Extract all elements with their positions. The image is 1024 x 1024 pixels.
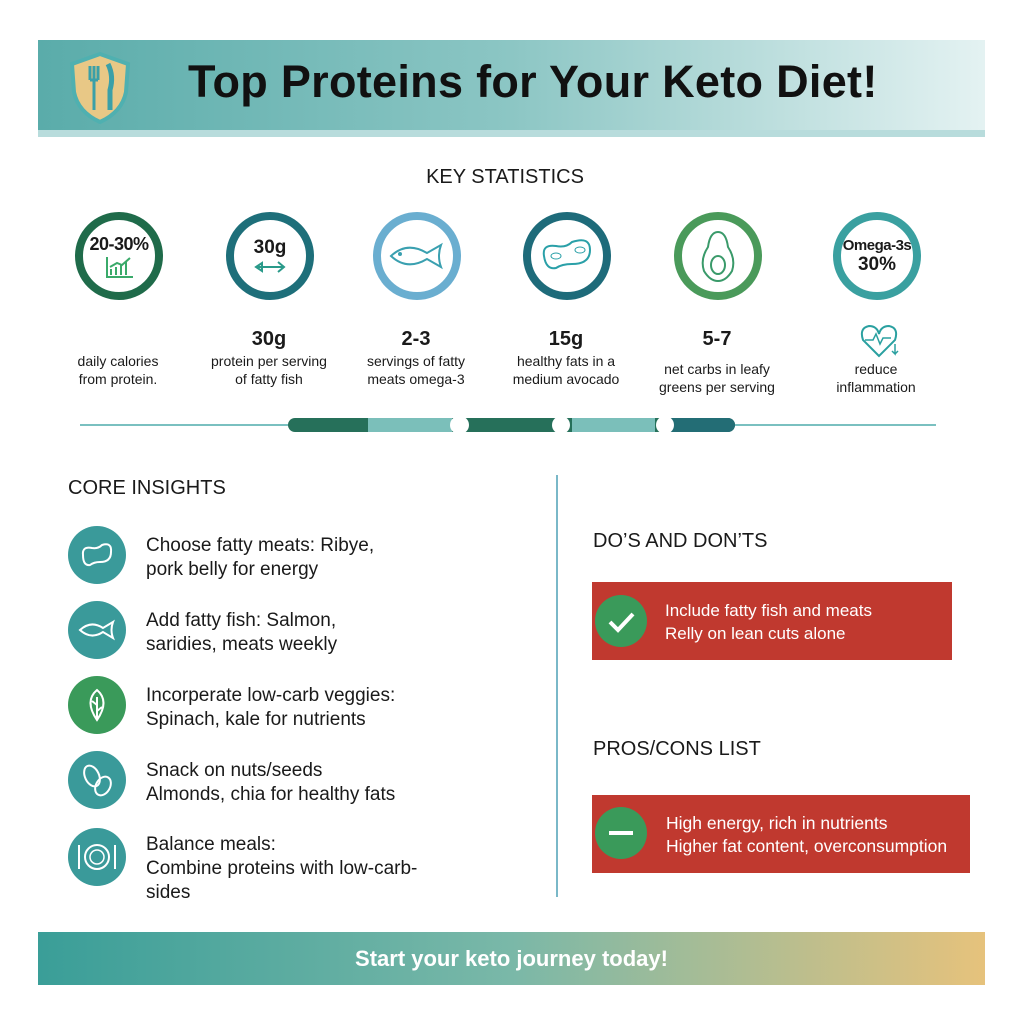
- footer banner: Start your keto journey today!: [355, 946, 668, 971]
- pros/cons box: Higher fat content, overconsumption: [666, 836, 947, 856]
- stat 4: medium avocado: [513, 371, 619, 387]
- insight 5: sides: [146, 882, 190, 903]
- stat 3: meats omega-3: [367, 371, 465, 387]
- do's box: Include fatty fish and meats: [665, 601, 872, 620]
- insight 2: [68, 601, 337, 659]
- stat 2: [211, 212, 327, 387]
- insight 4: Snack on nuts/seeds: [146, 760, 322, 781]
- stat 1: from protein.: [79, 371, 157, 387]
- insight 1: pork belly for energy: [146, 559, 318, 580]
- stat 5: 5-7: [703, 328, 731, 350]
- stat 6: [833, 212, 921, 395]
- stat 4: [513, 212, 619, 387]
- insight 5: [68, 828, 417, 903]
- stat 6: 30%: [858, 254, 896, 274]
- heading: pros/cons: PROS/CONS LIST: [593, 738, 761, 760]
- insight 2: saridies, meats weekly: [146, 634, 337, 655]
- pros/cons box: High energy, rich in nutrients: [666, 813, 887, 833]
- footer banner: [38, 932, 985, 985]
- icon: shield with fork and knife: [70, 52, 130, 124]
- insight 1: [68, 526, 374, 584]
- stat 6: Omega-3s: [843, 236, 911, 254]
- insight 5: Combine proteins with low-carb-: [146, 858, 417, 879]
- insight 4: Almonds, chia for healthy fats: [146, 784, 395, 805]
- stat 2: 30g: [252, 328, 286, 350]
- stat 4: healthy fats in a: [517, 353, 615, 369]
- stat 2: of fatty fish: [235, 371, 303, 387]
- stat 3: 2-3: [402, 328, 430, 350]
- stat 6: reduce: [855, 361, 897, 377]
- insight 3: Spinach, kale for nutrients: [146, 709, 366, 730]
- insight 3: [68, 676, 395, 734]
- stat 3: [367, 212, 465, 387]
- divider: [556, 475, 558, 897]
- title: Top Proteins for Your Keto Diet!: [188, 56, 878, 107]
- insight 4: [68, 751, 395, 809]
- insight 2: Add fatty fish: Salmon,: [146, 610, 336, 631]
- header banner: [38, 40, 985, 137]
- stat 5: [659, 212, 775, 395]
- stat 5: net carbs in leafy: [664, 361, 770, 377]
- stat 2: 30g: [254, 237, 286, 258]
- stat 6: inflammation: [836, 379, 916, 395]
- heading: do's and don'ts: DO’S AND DON’TS: [593, 530, 767, 552]
- pros/cons box: [592, 795, 970, 873]
- insight 3: Incorperate low-carb veggies:: [146, 685, 395, 706]
- progress bar: [80, 418, 936, 432]
- insight 1: Choose fatty meats: Ribye,: [146, 535, 374, 556]
- stat 2: protein per serving: [211, 353, 327, 369]
- stat 3: servings of fatty: [367, 353, 465, 369]
- icon: minus: [595, 807, 647, 859]
- heading: CORE INSIGHTS: [68, 477, 226, 499]
- icon: check: [595, 595, 647, 647]
- do's box: [592, 582, 952, 660]
- insight 5: Balance meals:: [146, 834, 276, 855]
- do's box: Relly on lean cuts alone: [665, 624, 846, 643]
- stat 5: greens per serving: [659, 379, 775, 395]
- heading: key statistics: KEY STATISTICS: [426, 166, 584, 188]
- stat 1: daily calories: [78, 353, 158, 369]
- stat 1: 20-30%: [89, 234, 149, 254]
- stat 4: 15g: [549, 328, 583, 350]
- stat 1: [75, 212, 163, 387]
